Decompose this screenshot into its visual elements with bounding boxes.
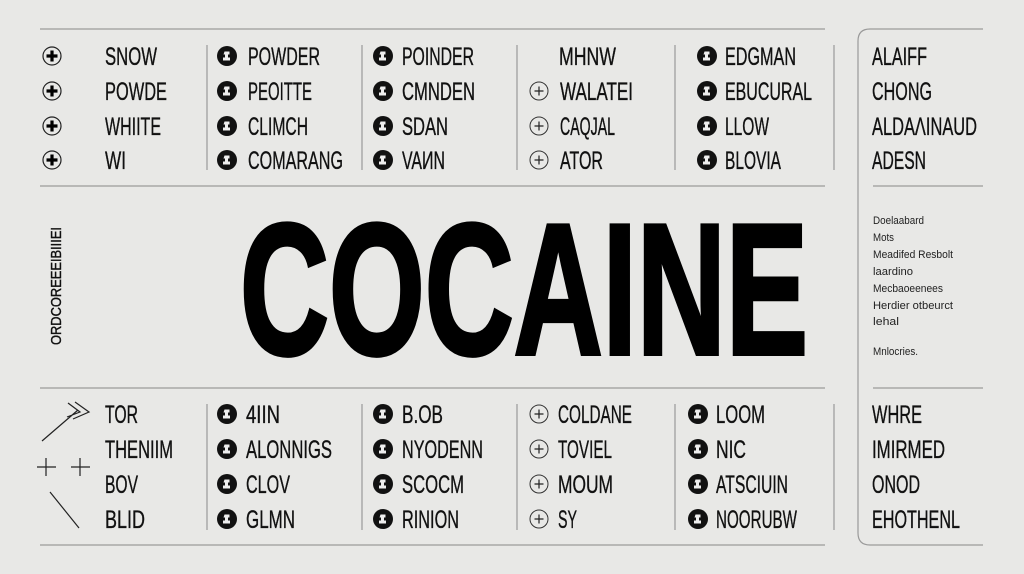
sidebar bottom list <box>872 401 960 534</box>
column 1 top <box>43 43 167 175</box>
column 3 bottom: NYODENN <box>402 436 483 464</box>
column 1 bottom: BLID <box>105 506 145 534</box>
column 4 top: CAQJAL <box>560 113 615 141</box>
sidebar notes: Doelaabard <box>873 215 924 227</box>
column 2 top: CLIMCH <box>248 113 308 141</box>
icon: arrows and plus marks <box>37 402 90 528</box>
column 4 bottom: COLDANE <box>558 401 632 429</box>
column 4 bottom: SY <box>558 506 577 534</box>
column 3 bottom: B.OB <box>402 401 443 429</box>
column 2 bottom <box>217 401 332 534</box>
column 1 top: POWDE <box>105 78 167 106</box>
column 1 top: WI <box>105 147 126 175</box>
column 5 top: EBUCURAL <box>725 78 812 106</box>
column 4 top: ATOR <box>560 147 603 175</box>
column 3 top: CMNDEN <box>402 78 475 106</box>
column 2 bottom: 4IIN <box>246 401 280 429</box>
column 1 top: SNOW <box>105 43 157 71</box>
sidebar top list: ALAIFF <box>872 43 927 71</box>
column 2 bottom: CLOV <box>246 471 290 499</box>
column 4 bottom <box>530 401 632 534</box>
sidebar bottom list: IMIRMED <box>872 436 945 464</box>
column 2 top <box>217 43 343 175</box>
column 3 bottom: RINION <box>402 506 459 534</box>
sidebar bottom list: ONOD <box>872 471 920 499</box>
column 4 top: WALATEI <box>560 78 633 106</box>
column 2 top: POWDER <box>248 43 320 71</box>
sidebar bottom list: WHRE <box>872 401 922 429</box>
column 2 top: COMARANG <box>248 147 343 175</box>
column 2 bottom: GLMN <box>246 506 295 534</box>
column 5 bottom: NOORUBW <box>716 506 797 534</box>
column 5 top: LLOW <box>725 113 769 141</box>
column 1 bottom: BOV <box>105 471 138 499</box>
vertical side label: ORDCOREEEIBIIIEI <box>48 227 65 345</box>
column 3 top: SDAN <box>402 113 448 141</box>
sidebar top list: CHONG <box>872 78 932 106</box>
column 5 bottom <box>688 401 797 534</box>
column 5 top: EDGMAN <box>725 43 796 71</box>
column 2 bottom: ALONNIGS <box>246 436 332 464</box>
sidebar bottom list: EHOTHENL <box>872 506 960 534</box>
column 3 top <box>373 43 475 175</box>
column 4 top <box>530 43 633 175</box>
panel: top list <box>43 43 812 175</box>
sidebar notes: lehal <box>873 316 899 328</box>
sidebar notes <box>873 215 953 358</box>
column 1 bottom <box>105 401 173 534</box>
column 3 bottom: SCOCM <box>402 471 464 499</box>
column 3 top: VAИN <box>402 147 445 175</box>
column 3 top: POINDER <box>402 43 474 71</box>
sidebar notes: laardino <box>873 266 913 278</box>
column 1 bottom: THENIIM <box>105 436 173 464</box>
sidebar notes: Herdier otbeurct <box>873 300 953 312</box>
column 3 bottom <box>373 401 483 534</box>
column 5 top: BLOVIA <box>725 147 781 175</box>
column 5 top <box>697 43 812 175</box>
panel: right sidebar <box>872 43 977 534</box>
sidebar top list: ADESN <box>872 147 926 175</box>
sidebar top list <box>872 43 977 175</box>
column 1 bottom: TOR <box>105 401 138 429</box>
column 5 bottom: ATSCIUIN <box>716 471 788 499</box>
column 4 bottom: TOVIEL <box>558 436 612 464</box>
column 1 top: WHIITE <box>105 113 161 141</box>
column 2 top: PEOITTE <box>248 78 312 106</box>
panel: bottom list <box>37 401 797 534</box>
sidebar notes: Mecbaoeenees <box>873 283 943 295</box>
column 4 bottom: MOUM <box>558 471 613 499</box>
column 4 top: MHNW <box>559 43 616 71</box>
column 5 bottom: NIC <box>716 436 746 464</box>
column 5 bottom: LOOM <box>716 401 765 429</box>
sidebar notes: Mnlocries. <box>873 346 918 358</box>
sidebar notes: Mots <box>873 232 894 244</box>
sidebar notes: Meadifed Resbolt <box>873 249 953 261</box>
